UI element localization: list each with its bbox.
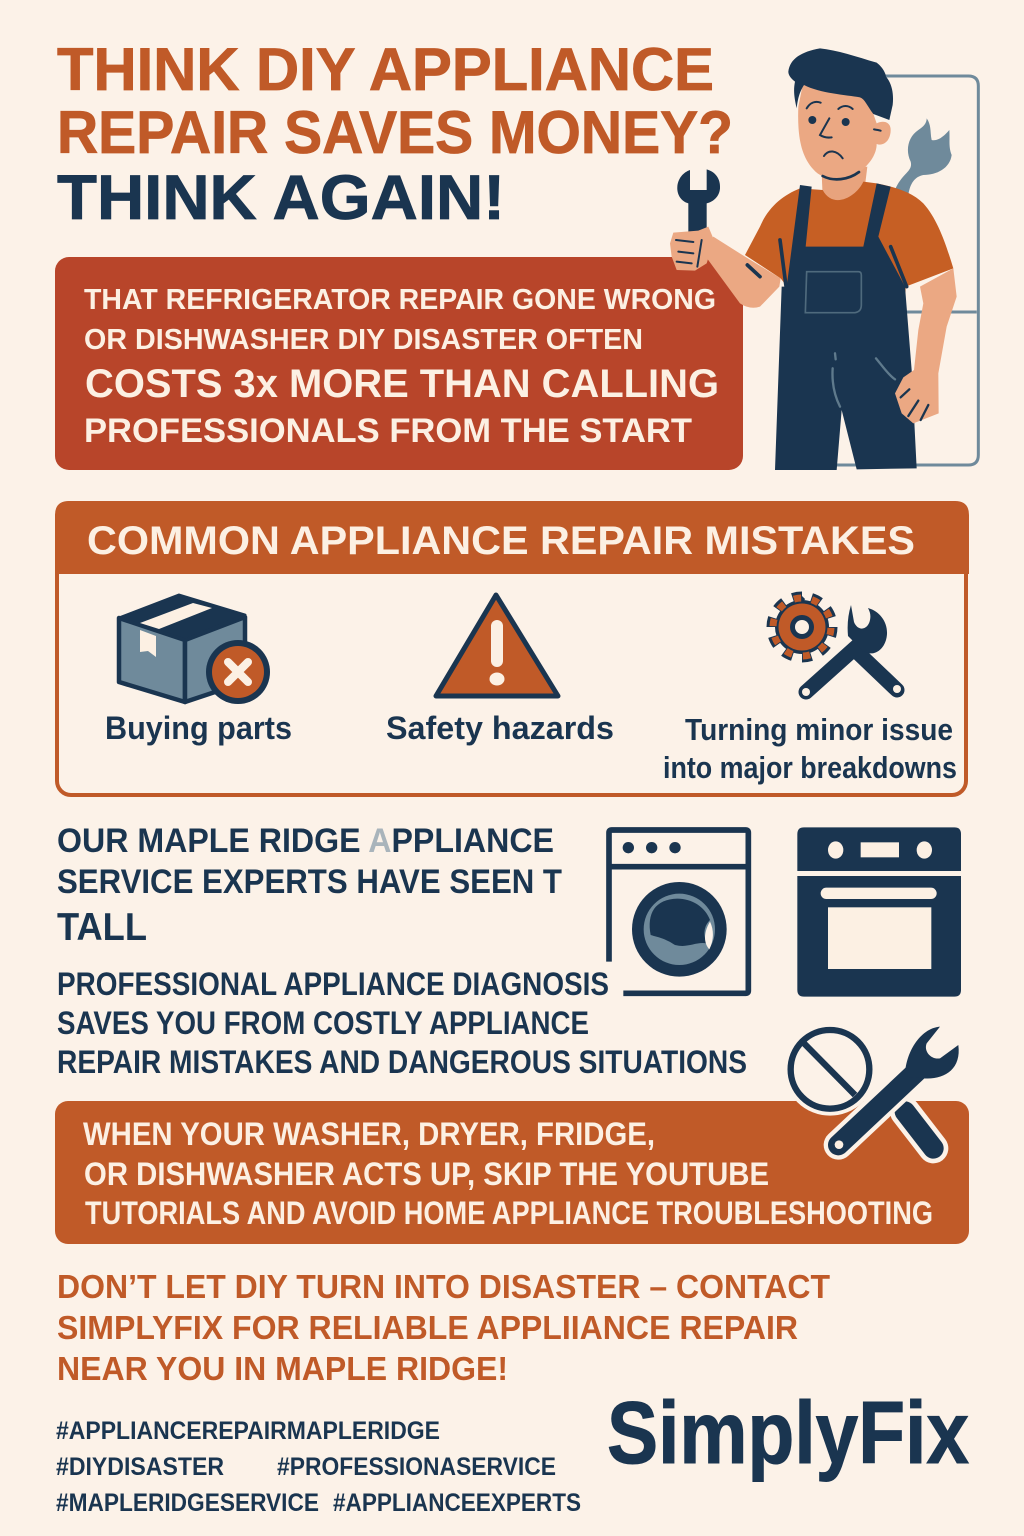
panel: cost warning bbox=[55, 257, 743, 470]
hashtags bbox=[56, 1417, 581, 1517]
hashtags: #PROFESSIONASERVICE bbox=[277, 1453, 556, 1481]
overalls bbox=[775, 183, 917, 470]
title: REPAIR SAVES MONEY? bbox=[57, 99, 733, 166]
text: professional diagnosis: SAVES YOU FROM COSTLY APPLIANCE bbox=[57, 1005, 589, 1041]
title: THINK DIY APPLIANCE bbox=[57, 36, 714, 103]
icon: no DIY, crossed tools bbox=[787, 1027, 959, 1149]
panel: skip the tutorials: WHEN YOUR WASHER, DRYER, FRIDGE, bbox=[83, 1116, 655, 1152]
text: experts have seen it all bbox=[57, 822, 562, 949]
text: professional diagnosis: PROFESSIONAL APPLIANCE DIAGNOSIS bbox=[57, 966, 609, 1002]
arm holding wrench bbox=[703, 237, 781, 308]
panel: common mistakes bbox=[55, 501, 969, 795]
panel: skip the tutorials bbox=[55, 1101, 969, 1244]
label: buying parts: Buying parts bbox=[105, 710, 292, 746]
hashtags: #DIYDISASTER bbox=[56, 1453, 224, 1481]
text: experts have seen it all: SERVICE EXPERTS HAVE SEEN T bbox=[57, 863, 562, 901]
hashtags: #APPLIANCEREPAIRMAPLERIDGE bbox=[56, 1417, 440, 1445]
panel: cost warning: COSTS 3x MORE THAN CALLING bbox=[85, 362, 719, 406]
logo: SimplyFix: SimplyFix bbox=[607, 1383, 969, 1482]
title bbox=[57, 36, 733, 233]
panel: cost warning: OR DISHWASHER DIY DISASTER OFTEN bbox=[84, 324, 643, 356]
icon: gear and wrench bbox=[771, 596, 901, 696]
hashtags: #MAPLERIDGESERVICE bbox=[56, 1489, 319, 1517]
hair bbox=[788, 48, 893, 120]
label: minor issue to major breakdowns bbox=[663, 712, 957, 785]
call to action: DON’T LET DIY TURN INTO DISASTER – CONTACT bbox=[57, 1268, 830, 1305]
call to action: NEAR YOU IN MAPLE RIDGE! bbox=[57, 1350, 508, 1387]
icon: box with x bbox=[119, 595, 270, 704]
label: minor issue to major breakdowns: Turning minor issue bbox=[685, 712, 953, 747]
smoke from fridge bbox=[895, 118, 952, 195]
text: professional diagnosis: REPAIR MISTAKES AND DANGEROUS SITUATIONS bbox=[57, 1044, 747, 1080]
icon: washing machine bbox=[609, 830, 748, 993]
illustration: worried repairman with fridge bbox=[670, 48, 978, 470]
face details bbox=[807, 102, 881, 179]
hashtags: #APPLIANCEEXPERTS bbox=[333, 1489, 581, 1517]
panel: common mistakes: COMMON APPLIANCE REPAIR MISTAKES bbox=[87, 519, 915, 563]
neck bbox=[822, 167, 867, 204]
panel: cost warning: PROFESSIONALS FROM THE START bbox=[84, 412, 692, 450]
text: experts have seen it all: TALL bbox=[57, 906, 147, 949]
icon: warning triangle bbox=[436, 595, 558, 696]
call to action: SIMPLYFIX FOR RELIABLE APPLIIANCE REPAIR bbox=[57, 1309, 798, 1346]
label: safety hazards: Safety hazards bbox=[386, 710, 614, 746]
wrench in hand bbox=[677, 169, 720, 240]
text: professional diagnosis bbox=[57, 966, 747, 1080]
overalls pocket bbox=[805, 272, 861, 313]
orange shirt bbox=[745, 182, 953, 311]
label: minor issue to major breakdowns: into major breakdowns bbox=[663, 750, 957, 785]
panel frame bbox=[57, 503, 966, 795]
call to action bbox=[57, 1268, 830, 1387]
title: THINK AGAIN! bbox=[57, 163, 505, 233]
panel: skip the tutorials: OR DISHWASHER ACTS UP, SKIP THE YOUTUBE bbox=[84, 1156, 769, 1192]
icon: oven bbox=[797, 827, 961, 997]
head bbox=[798, 82, 891, 179]
panel: cost warning: THAT REFRIGERATOR REPAIR GONE WRONG bbox=[84, 284, 716, 316]
text: experts have seen it all: OUR MAPLE RIDGE APPLIANCE bbox=[57, 822, 554, 860]
panel header bbox=[55, 501, 969, 574]
hand bbox=[670, 227, 714, 271]
right arm and hand bbox=[895, 268, 957, 423]
fridge outline bbox=[833, 76, 978, 465]
